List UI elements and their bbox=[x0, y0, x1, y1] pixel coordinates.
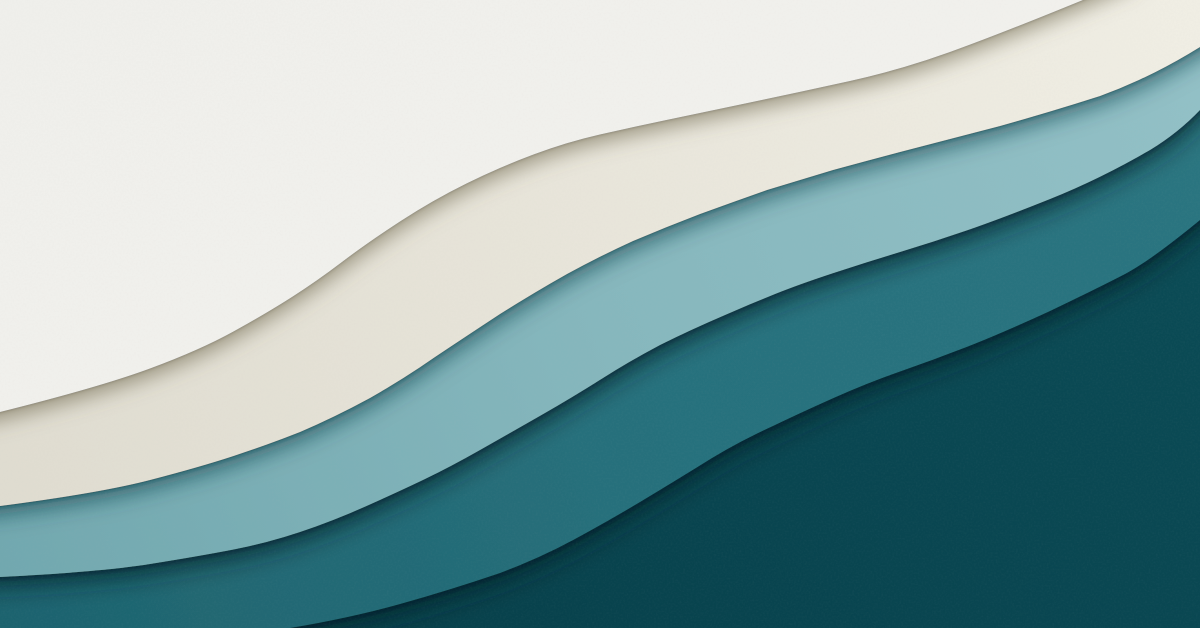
layer: off-white top sheet bbox=[0, 0, 1135, 420]
